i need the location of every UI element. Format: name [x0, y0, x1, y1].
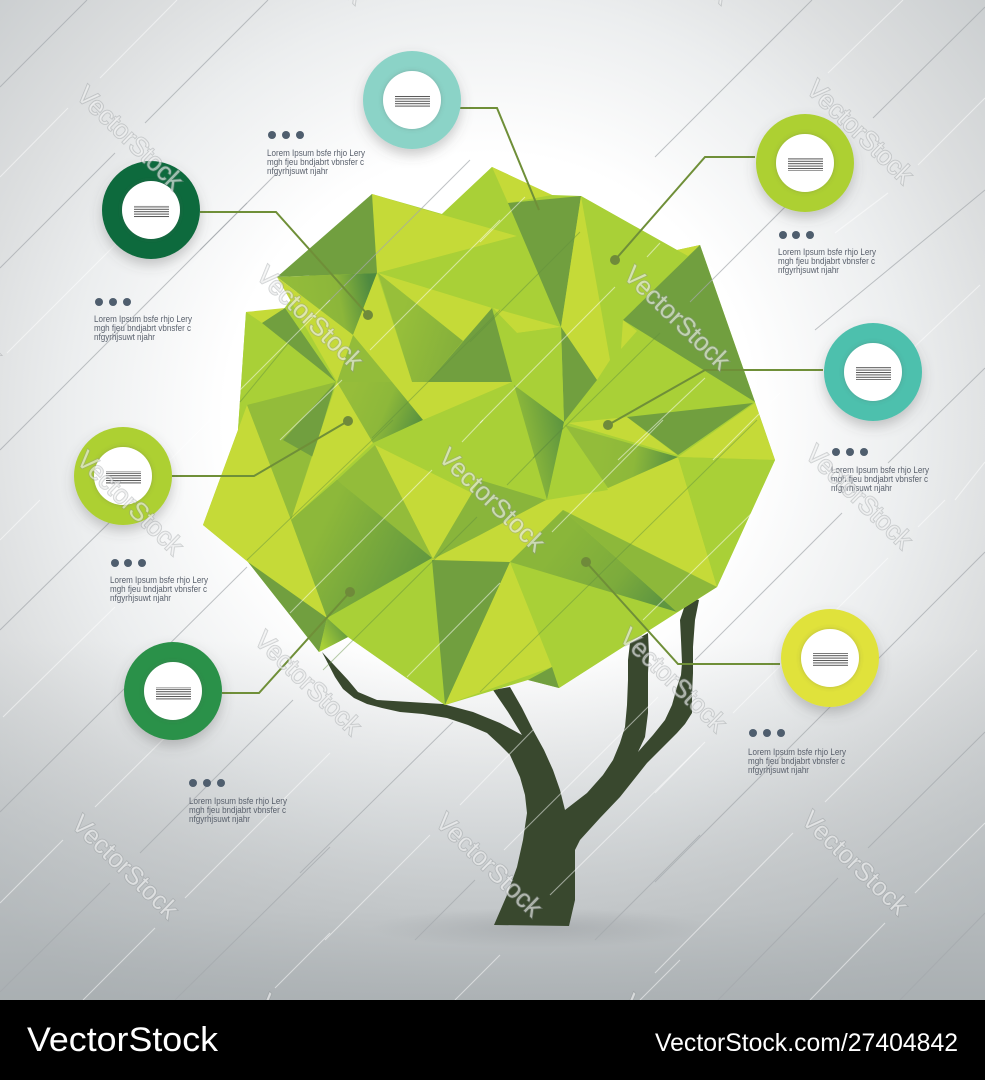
- watermarks: VectorStock: [249, 624, 368, 741]
- caption: turquoise ring: nfgyrhjsuwt njahr: [831, 483, 892, 493]
- connector: dark green ring: [200, 212, 373, 320]
- caption: top teal ring: nfgyrhjsuwt njahr: [267, 166, 328, 176]
- caption: lime ring left: mgh fjeu bndjabrt vbnsfer c: [110, 584, 208, 594]
- caption: lime ring left: [110, 559, 209, 603]
- ring: lime top right: [756, 114, 854, 212]
- caption: lime ring top right: Lorem Ipsum bsfe rhjo Lery: [778, 247, 877, 257]
- watermarks: VectorStock: [66, 808, 185, 925]
- connector: top teal ring: [460, 108, 539, 210]
- watermarks: VectorStock: [614, 621, 733, 738]
- polygon tree canopy: [203, 167, 775, 705]
- watermarks: VectorStock: [71, 444, 190, 561]
- caption: lime ring top right: nfgyrhjsuwt njahr: [778, 265, 839, 275]
- watermarks: VectorStock: [71, 79, 190, 196]
- caption: turquoise ring: Lorem Ipsum bsfe rhjo Lery: [831, 465, 930, 475]
- caption: lime ring top right: mgh fjeu bndjabrt vbnsfer c: [778, 256, 876, 266]
- connector: yellow ring bottom right: [581, 557, 780, 664]
- caption: yellow ring bottom right: nfgyrhjsuwt njahr: [748, 765, 809, 775]
- caption: yellow ring bottom right: [748, 729, 847, 775]
- watermarks: VectorStock: [251, 259, 370, 376]
- caption: turquoise ring: mgh fjeu bndjabrt vbnsfer c: [831, 474, 929, 484]
- ring: yellow bottom right: [781, 609, 879, 707]
- caption: yellow ring bottom right: Lorem Ipsum bsfe rhjo Lery: [748, 747, 847, 757]
- caption: turquoise ring: [831, 448, 930, 493]
- caption: green ring bottom left: mgh fjeu bndjabrt vbnsfer c: [189, 805, 287, 815]
- connector: lime ring top right: [610, 157, 755, 265]
- watermarks: VectorStock: [433, 441, 552, 558]
- ring: turquoise: [824, 323, 922, 421]
- footer image id: VectorStock.com/27404842: [655, 1029, 958, 1057]
- caption: dark green ring: Lorem Ipsum bsfe rhjo Lery: [94, 314, 193, 324]
- caption: green ring bottom left: Lorem Ipsum bsfe rhjo Lery: [189, 796, 288, 806]
- connector: green ring bottom left: [222, 587, 355, 693]
- ring: dark green: [102, 161, 200, 259]
- caption: dark green ring: [94, 298, 193, 342]
- ring: lime left: [74, 427, 172, 525]
- ring: top teal: [363, 51, 461, 149]
- tree ground shadow: [370, 908, 710, 948]
- ring: green bottom left: [124, 642, 222, 740]
- caption: lime ring top right: [778, 231, 877, 275]
- caption: lime ring left: nfgyrhjsuwt njahr: [110, 593, 171, 603]
- watermarks: VectorStock: [430, 806, 549, 923]
- caption: dark green ring: nfgyrhjsuwt njahr: [94, 332, 155, 342]
- tree trunk and branches: [322, 598, 699, 926]
- caption: green ring bottom left: nfgyrhjsuwt njahr: [189, 814, 250, 824]
- watermarks: VectorStock: [801, 73, 920, 190]
- footer band: [0, 1000, 985, 1080]
- caption: lime ring left: Lorem Ipsum bsfe rhjo Lery: [110, 575, 209, 585]
- watermarks: VectorStock: [796, 804, 915, 921]
- canopy silhouette base: [203, 167, 775, 705]
- floor shading: [0, 640, 985, 1000]
- caption: green ring bottom left: [189, 779, 288, 824]
- connector: turquoise ring: [603, 370, 823, 430]
- caption: top teal ring: [267, 131, 366, 176]
- watermarks: VectorStock: [800, 438, 919, 555]
- caption: top teal ring: Lorem Ipsum bsfe rhjo Lery: [267, 148, 366, 158]
- caption: top teal ring: mgh fjeu bndjabrt vbnsfer c: [267, 157, 365, 167]
- caption: yellow ring bottom right: mgh fjeu bndjabrt vbnsfer c: [748, 756, 846, 766]
- footer brand: VectorStock: [27, 1021, 219, 1059]
- connector: lime ring left: [172, 416, 353, 476]
- watermarks: VectorStock: [618, 259, 737, 376]
- caption: dark green ring: mgh fjeu bndjabrt vbnsfer c: [94, 323, 192, 333]
